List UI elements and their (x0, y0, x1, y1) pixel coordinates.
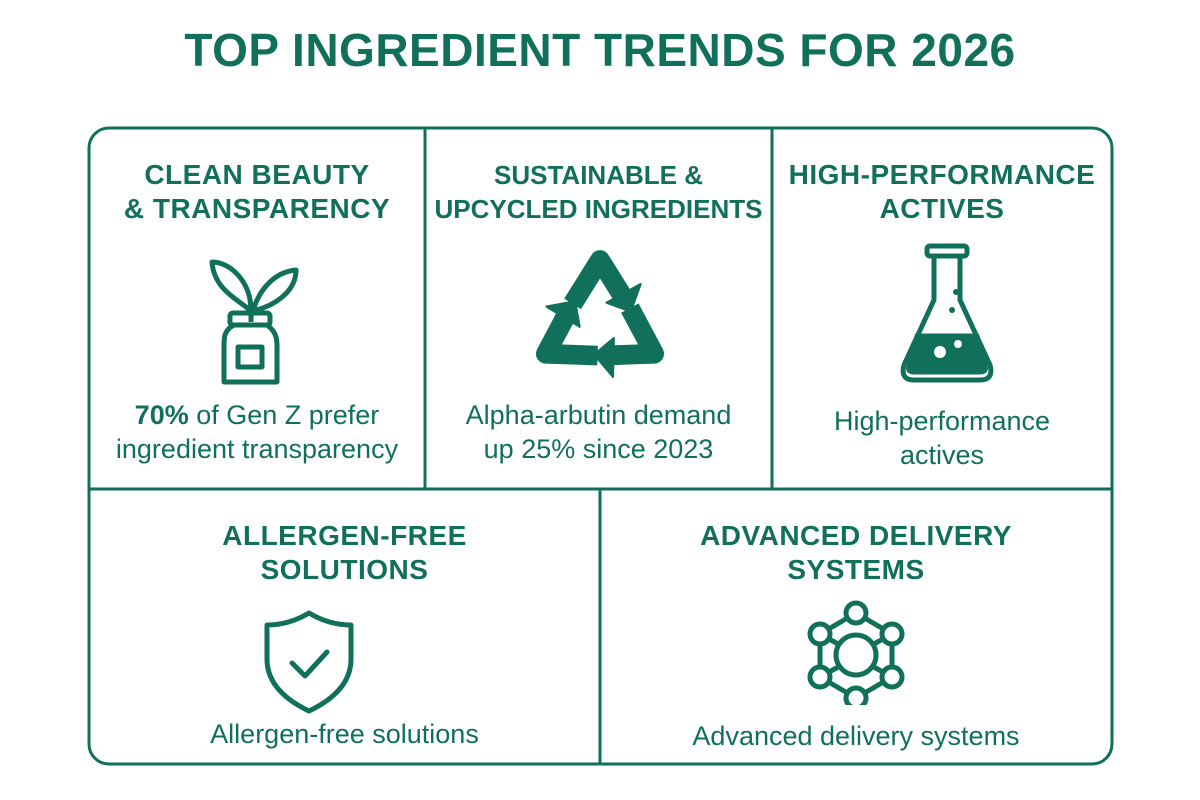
stat text: up 25% since 2023 (484, 434, 713, 464)
stat text: 70% of Gen Z prefer (135, 400, 379, 430)
stat text: Alpha-arbutin demand (466, 400, 731, 430)
panel: clean beauty (116, 159, 398, 464)
icon: recycle (536, 250, 664, 378)
heading: ADVANCED DELIVERY (700, 520, 1012, 551)
heading (789, 159, 1095, 224)
caption: Advanced delivery systems (692, 721, 1020, 751)
stat text (466, 400, 731, 464)
heading: HIGH-PERFORMANCE (789, 159, 1095, 190)
heading: & TRANSPARENCY (124, 193, 390, 224)
heading (222, 520, 467, 585)
stat text: actives (900, 440, 984, 470)
panel: sustainable (435, 160, 762, 464)
heading: SOLUTIONS (261, 554, 428, 585)
heading (124, 159, 390, 224)
caption: Allergen-free solutions (210, 719, 479, 749)
panel: actives (789, 159, 1095, 470)
heading: ACTIVES (880, 193, 1004, 224)
heading: CLEAN BEAUTY (144, 159, 370, 190)
stat text: High-performance (834, 406, 1050, 436)
stat text: ingredient transparency (116, 434, 398, 464)
heading: SYSTEMS (787, 554, 925, 585)
heading (700, 520, 1012, 585)
stat text (834, 406, 1050, 470)
panel: allergen-free (210, 520, 479, 749)
panel: delivery systems (692, 520, 1020, 751)
icon: molecule (808, 600, 904, 705)
heading: SUSTAINABLE & (494, 160, 703, 190)
icon: shield (264, 610, 354, 714)
heading: UPCYCLED INGREDIENTS (435, 194, 762, 224)
heading (435, 160, 762, 224)
icon: flask (900, 244, 994, 382)
title: TOP INGREDIENT TRENDS FOR 2026 (184, 24, 1016, 76)
heading: ALLERGEN-FREE (222, 520, 467, 551)
stat text (116, 400, 398, 464)
icon: plant jar (210, 260, 298, 384)
